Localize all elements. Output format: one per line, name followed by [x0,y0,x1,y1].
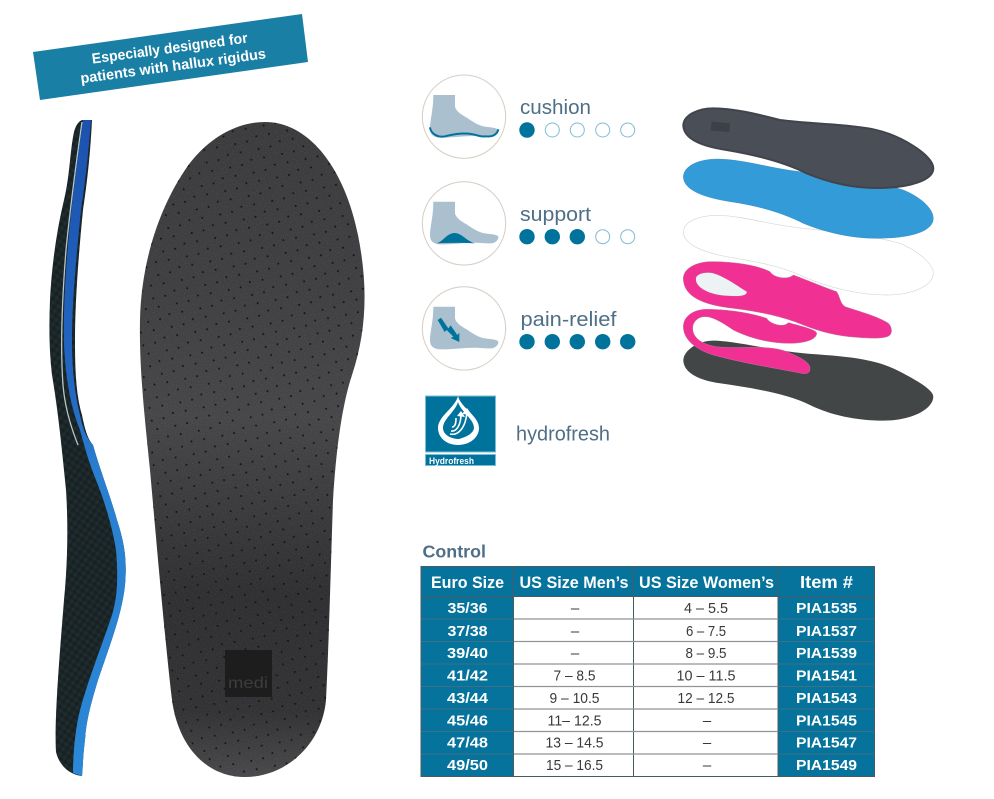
row 47/48: 47/48 [447,734,488,752]
row 39/40: – [571,645,580,662]
icon: hydrofresh drop: Hydrofresh [429,456,474,467]
row 45/46: 11– 12.5 [548,712,602,730]
header row: Euro Size [431,574,504,592]
hole insert [696,273,747,296]
row 35/36: 35/36 [448,600,488,617]
row 35/36: 4 – 5.5 [684,600,728,617]
row 41/42: PIA1541 [796,668,857,684]
row 37/38 [448,623,857,640]
logo patch [225,650,272,697]
logo patch: medi [228,675,268,692]
row 43/44: 43/44 [447,690,489,707]
banner: especially designed for hallux rigidus: patients with hallux rigidus [79,46,267,87]
icon: hydrofresh drop [426,396,496,467]
row 47/48: – [703,734,712,752]
row 47/48: PIA1547 [796,734,857,752]
row 37/38: – [571,623,580,640]
row 49/50: PIA1549 [796,757,857,774]
rating: support [422,182,635,265]
icon: foot pain relief [422,287,506,370]
layer: blue [683,159,933,238]
row 49/50 [447,757,857,774]
row 45/46 [447,712,857,730]
row 47/48 [447,734,857,752]
row 39/40: PIA1539 [796,645,857,662]
row 37/38: 37/38 [448,623,488,640]
row 49/50: – [703,757,712,774]
rating: pain-relief [422,287,635,370]
row 41/42 [447,668,857,684]
layer: pink upper [683,262,892,338]
icon: foot support [422,182,506,265]
row 37/38: 6 – 7.5 [686,623,726,640]
row 45/46: PIA1545 [796,712,857,730]
row 35/36 [448,600,857,617]
header row [431,572,853,592]
row 41/42: 7 – 8.5 [554,668,596,684]
banner: especially designed for hallux rigidus [33,14,308,100]
row 41/42: 10 – 11.5 [676,668,736,684]
hydrofresh badge: hydrofresh [516,424,610,446]
header row: Item # [800,572,853,592]
row 35/36: – [571,600,580,617]
header row: US Size Men’s [520,574,628,592]
row 47/48: 13 – 14.5 [546,734,604,752]
header row: US Size Women’s [639,574,774,592]
row 43/44: 12 – 12.5 [678,690,734,707]
layer: dark base [683,341,933,421]
row 45/46: – [703,712,712,730]
banner: especially designed for hallux rigidus: Especially designed for [91,31,249,68]
row 37/38: PIA1537 [796,623,857,640]
size table [421,566,874,777]
row 45/46: 45/46 [447,712,488,730]
rating: support: support [520,204,591,226]
hydrofresh badge [426,396,610,467]
rating: cushion [422,75,635,158]
icon: foot cushion [422,75,506,158]
insole top view [140,122,365,777]
row 35/36: PIA1535 [796,600,857,617]
row 39/40 [447,645,857,662]
row 39/40: 39/40 [447,645,488,662]
rating: cushion: cushion [520,97,591,119]
row 49/50: 15 – 16.5 [546,757,603,774]
row 43/44: PIA1543 [796,690,857,707]
rating: pain-relief: pain-relief [520,309,617,331]
row 49/50: 49/50 [447,757,488,774]
row 41/42: 41/42 [447,668,488,684]
table heading: Control [422,542,486,562]
layer: white [683,215,933,295]
row 43/44 [447,690,857,707]
exploded insole layers [683,108,933,421]
row 39/40: 8 – 9.5 [686,645,726,662]
insole side profile [49,120,126,776]
layer: pink lower [683,309,817,374]
row 43/44: 9 – 10.5 [550,690,600,707]
layer: grey top cover [683,108,933,188]
